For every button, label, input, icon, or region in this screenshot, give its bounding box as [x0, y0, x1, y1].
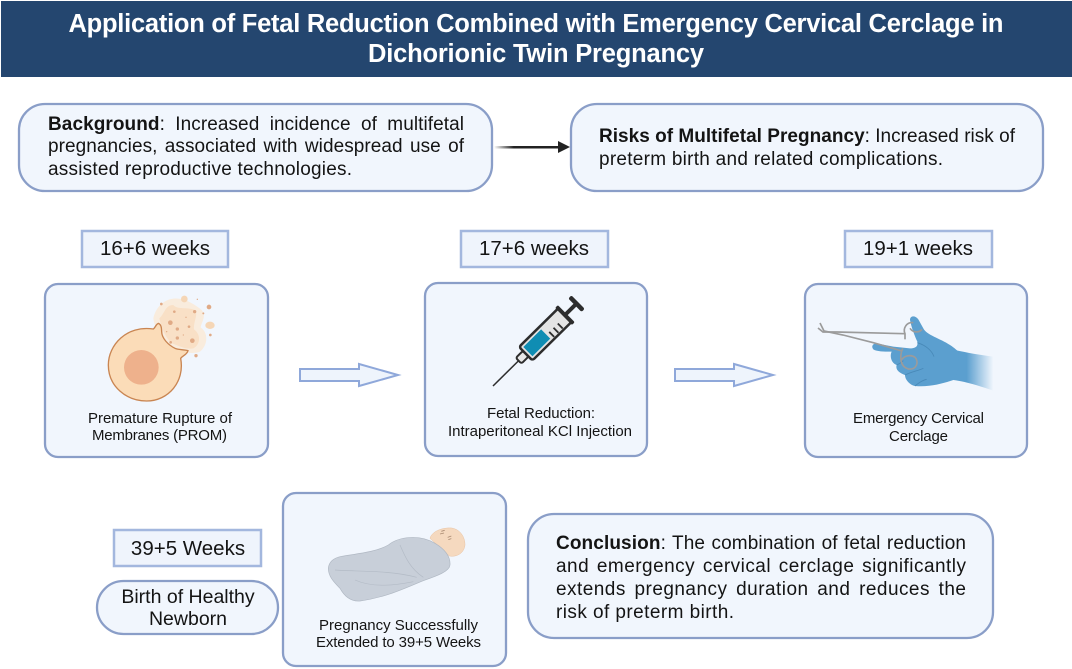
panel: conclusion: extends pregnancy duration and reduces the: [556, 579, 966, 600]
caption: Intraperitoneal KCl Injection: [448, 423, 632, 440]
pill: birth of healthy newborn: [97, 581, 278, 634]
pill: birth of healthy newborn: Newborn: [149, 608, 227, 630]
panel: background: Background: Increased incidence of multifetal: [48, 114, 464, 135]
panel: conclusion: [528, 514, 993, 638]
pill: birth of healthy newborn: Birth of Healthy: [121, 586, 255, 608]
caption: [853, 410, 984, 445]
panel: PROM: [45, 284, 268, 457]
caption: Pregnancy Successfully: [319, 617, 478, 634]
label: 39+5 weeks: 39+5 Weeks: [131, 537, 245, 560]
label: 19+1 weeks: [845, 231, 992, 267]
panel: background: assisted reproductive technologies.: [48, 159, 352, 180]
label: 19+1 weeks: 19+1 weeks: [863, 237, 973, 260]
icon: gloved hand with forceps: [818, 316, 993, 391]
title banner: Application of Fetal Reduction Combined with Emergency Cervical Cerclage in: [68, 10, 1004, 38]
icon: swaddled newborn: [328, 528, 465, 601]
arrow: fetal reduction to cerclage: [675, 364, 773, 386]
panel: cerclage: [805, 284, 1027, 457]
label: 16+6 weeks: 16+6 weeks: [100, 237, 210, 260]
caption: Emergency Cervical: [853, 410, 984, 427]
label: 16+6 weeks: [82, 231, 228, 267]
caption: [88, 410, 233, 444]
caption: Extended to 39+5 Weeks: [316, 634, 481, 651]
panel: background: [19, 104, 492, 191]
caption: [448, 405, 632, 440]
panel: risks of multifetal pregnancy: Risks of Multifetal Pregnancy: Increased risk of: [599, 126, 1016, 147]
caption: Membranes (PROM): [92, 427, 227, 444]
arrow: background to risks: [494, 141, 570, 153]
panel: conclusion: and emergency cervical cerclage significantly: [556, 556, 966, 577]
label: 17+6 weeks: 17+6 weeks: [479, 237, 589, 260]
panel: conclusion: risk of preterm birth.: [556, 602, 734, 623]
caption: Premature Rupture of: [88, 410, 233, 427]
icon: ruptured cell: [108, 296, 215, 401]
panel: risks of multifetal pregnancy: [571, 104, 1043, 191]
title banner: [1, 1, 1072, 77]
icon: syringe: [485, 294, 587, 395]
caption: Fetal Reduction:: [487, 405, 595, 422]
caption: [316, 617, 481, 651]
panel: fetal reduction: [425, 283, 647, 456]
panel: pregnancy extended: [283, 493, 506, 666]
label: 39+5 weeks: [114, 530, 261, 566]
title banner: Dichorionic Twin Pregnancy: [368, 40, 705, 68]
panel: background: pregnancies, associated with widespread use of: [48, 136, 465, 157]
label: 17+6 weeks: [461, 231, 608, 267]
arrow: PROM to fetal reduction: [300, 364, 398, 386]
panel: conclusion: Conclusion: The combination of fetal reduction: [556, 533, 966, 554]
caption: Cerclage: [889, 428, 948, 445]
panel: risks of multifetal pregnancy: preterm birth and related complications.: [599, 149, 943, 170]
